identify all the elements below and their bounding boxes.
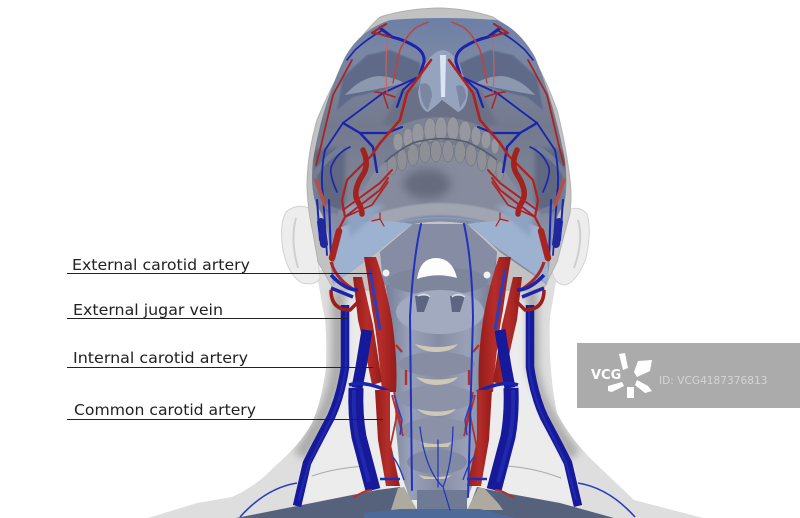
lower teeth: [387, 140, 504, 181]
mandible: [328, 142, 552, 285]
maxilla bridge: [395, 117, 484, 132]
watermark logo: VCG: [591, 368, 621, 383]
nose surround: [386, 86, 494, 124]
cervical spine: [380, 224, 497, 500]
midline veins: [410, 224, 473, 510]
body: translucent neck and shoulders: [140, 265, 710, 518]
chin shading: [403, 169, 451, 199]
mandible lower rim: [368, 202, 514, 222]
neck blood vessels: right: [463, 257, 635, 517]
head shell: [307, 8, 571, 290]
mandible underside: left: [333, 221, 413, 285]
mandible underside: right: [467, 221, 550, 285]
gum line: [385, 139, 497, 162]
head blood vessels: left: [316, 22, 431, 258]
upper teeth: [393, 117, 499, 154]
watermark panel: [577, 343, 800, 408]
label: External jugar vein: External jugar vein: [73, 301, 223, 319]
zygomatic arches: [311, 147, 569, 212]
watermark id: ID: VCG4187376813: [659, 375, 767, 387]
clavicles and sternum: [236, 487, 614, 518]
neck blood vessels: left: [240, 257, 406, 517]
label: Common carotid artery: Common carotid artery: [74, 401, 256, 419]
hyoid opening: [417, 258, 457, 279]
ear: left: [282, 206, 320, 284]
skull: [312, 18, 566, 285]
label: Internal carotid artery: Internal carotid artery: [73, 349, 248, 367]
label: External carotid artery: External carotid artery: [72, 256, 250, 274]
head blood vessels: right: [449, 22, 564, 258]
eye socket: left: [337, 50, 420, 110]
ear: right: [552, 208, 589, 285]
watermark logo: [591, 353, 652, 398]
dark temporal sides: [312, 147, 568, 212]
eye socket: right: [460, 50, 543, 110]
nasal bones: [418, 50, 468, 112]
intervertebral discs: [415, 344, 458, 479]
